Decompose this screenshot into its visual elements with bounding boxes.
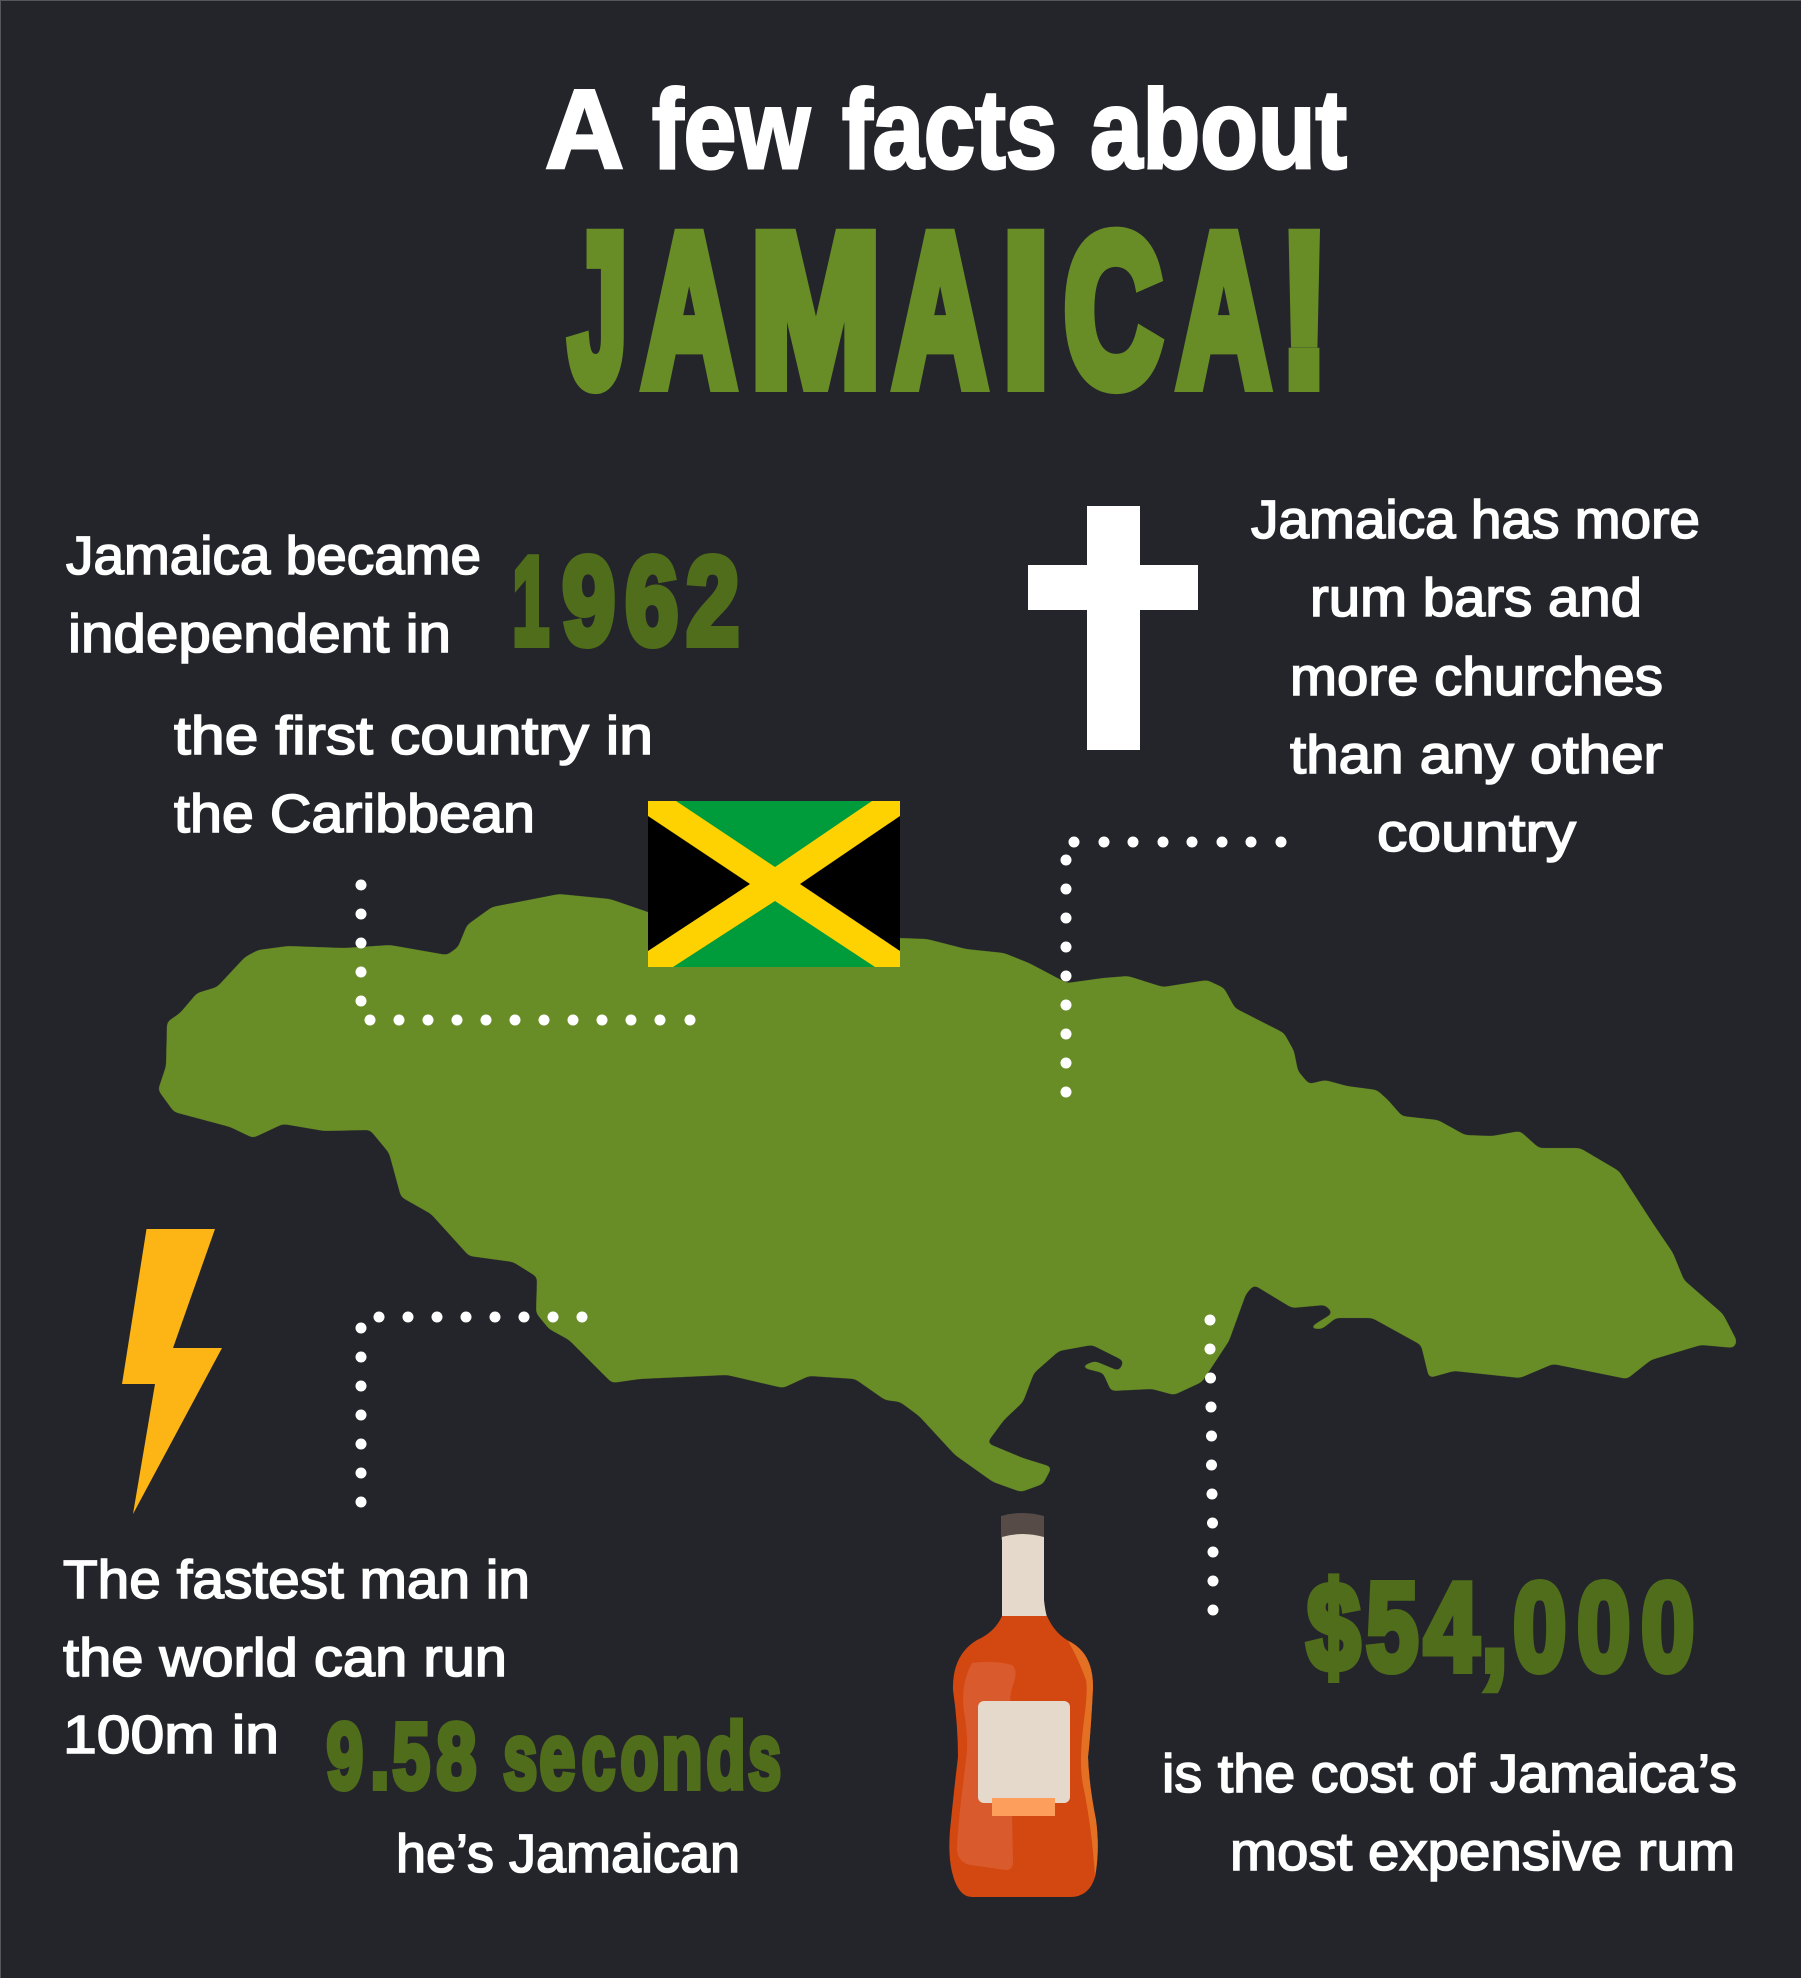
stat: $54,000 <box>1307 1559 1694 1697</box>
text: rum bars and churches fact: country <box>1377 803 1576 863</box>
title: facts <box>842 67 1057 192</box>
stat: 9.58 seconds: s <box>748 1704 781 1808</box>
heading: JAMAICA!: C <box>1064 191 1162 430</box>
stat: 9.58 seconds: c <box>582 1704 615 1808</box>
stat: 1962: 6 <box>625 533 678 671</box>
text: independence fact: Jamaica became <box>66 526 481 586</box>
text: fastest man fact: The fastest man in <box>63 1550 530 1610</box>
stat: 9.58 seconds: 5 <box>392 1704 430 1808</box>
heading: JAMAICA!: A <box>894 191 986 430</box>
text: rum bars and churches fact <box>1251 490 1700 863</box>
map of Jamaica <box>158 894 1737 1492</box>
text: rum price fact: most expensive rum <box>1230 1822 1735 1882</box>
heading: JAMAICA!: J <box>569 191 627 430</box>
stat: 9.58 seconds: s <box>503 1704 537 1808</box>
stat: $54,000: 5 <box>1366 1559 1418 1697</box>
stat: 9.58 seconds: e <box>540 1704 575 1808</box>
text: rum bars and churches fact: more churches <box>1290 647 1663 707</box>
dotted connector: independence to map <box>356 880 696 1026</box>
text: fastest man fact <box>63 1550 781 1884</box>
heading: JAMAICA!: I <box>1003 191 1049 430</box>
heading: JAMAICA! <box>569 191 1328 430</box>
stat: $54,000: 4 <box>1424 1559 1479 1697</box>
text: rum bars and churches fact: rum bars and <box>1310 568 1642 628</box>
icon: Jamaican flag <box>648 801 900 967</box>
text: independence fact: the Caribbean <box>174 784 535 844</box>
dotted connector: fastest man to map <box>356 1312 588 1508</box>
icon: rum bottle <box>949 1513 1098 1897</box>
icon: lightning bolt <box>122 1229 222 1514</box>
text: rum price fact: is the cost of Jamaica’s <box>1162 1744 1737 1804</box>
text: independence fact: the first country in <box>174 706 653 766</box>
stat: 9.58 seconds: d <box>706 1704 745 1808</box>
stat: 9.58 seconds: o <box>620 1704 658 1808</box>
stat: $54,000: $ <box>1307 1559 1360 1697</box>
text: rum price fact <box>1162 1559 1737 1882</box>
text: independence fact <box>66 526 739 844</box>
stat: $54,000: 0 <box>1577 1559 1630 1697</box>
stat: $54,000: 0 <box>1513 1559 1566 1697</box>
title <box>545 67 1347 192</box>
stat: 1962: 1 <box>512 533 549 671</box>
text: rum bars and churches fact: than any other <box>1290 725 1663 785</box>
title: about <box>1090 67 1347 192</box>
stat: 9.58 seconds: 8 <box>436 1704 476 1808</box>
stat: 9.58 seconds: . <box>370 1704 389 1808</box>
heading: JAMAICA!: ! <box>1280 191 1328 430</box>
dotted connector: rum bars to map <box>1060 836 1286 1098</box>
text: fastest man fact: the world can run <box>63 1628 507 1688</box>
text: fastest man fact: 100m in <box>63 1705 279 1765</box>
stat: 1962: 2 <box>686 533 739 671</box>
icon: cross <box>1028 506 1198 750</box>
heading: JAMAICA!: A <box>643 191 736 430</box>
heading: JAMAICA!: M <box>751 191 880 430</box>
text: independence fact: independent in <box>68 604 451 664</box>
title: A <box>545 67 624 192</box>
text: fastest man fact: he’s Jamaican <box>396 1824 740 1884</box>
stat: 9.58 seconds <box>326 1704 781 1808</box>
dotted connector: rum price to map <box>1204 1314 1218 1616</box>
stat: 1962 <box>512 533 739 671</box>
stat: 9.58 seconds: n <box>662 1704 702 1808</box>
stat: $54,000: , <box>1482 1559 1508 1697</box>
stat: 9.58 seconds: 9 <box>326 1704 363 1808</box>
stat: 1962: 9 <box>562 533 615 671</box>
text: rum bars and churches fact: Jamaica has more <box>1251 490 1700 550</box>
heading: JAMAICA!: A <box>1178 191 1270 430</box>
title: few <box>652 67 811 192</box>
stat: $54,000: 0 <box>1641 1559 1694 1697</box>
